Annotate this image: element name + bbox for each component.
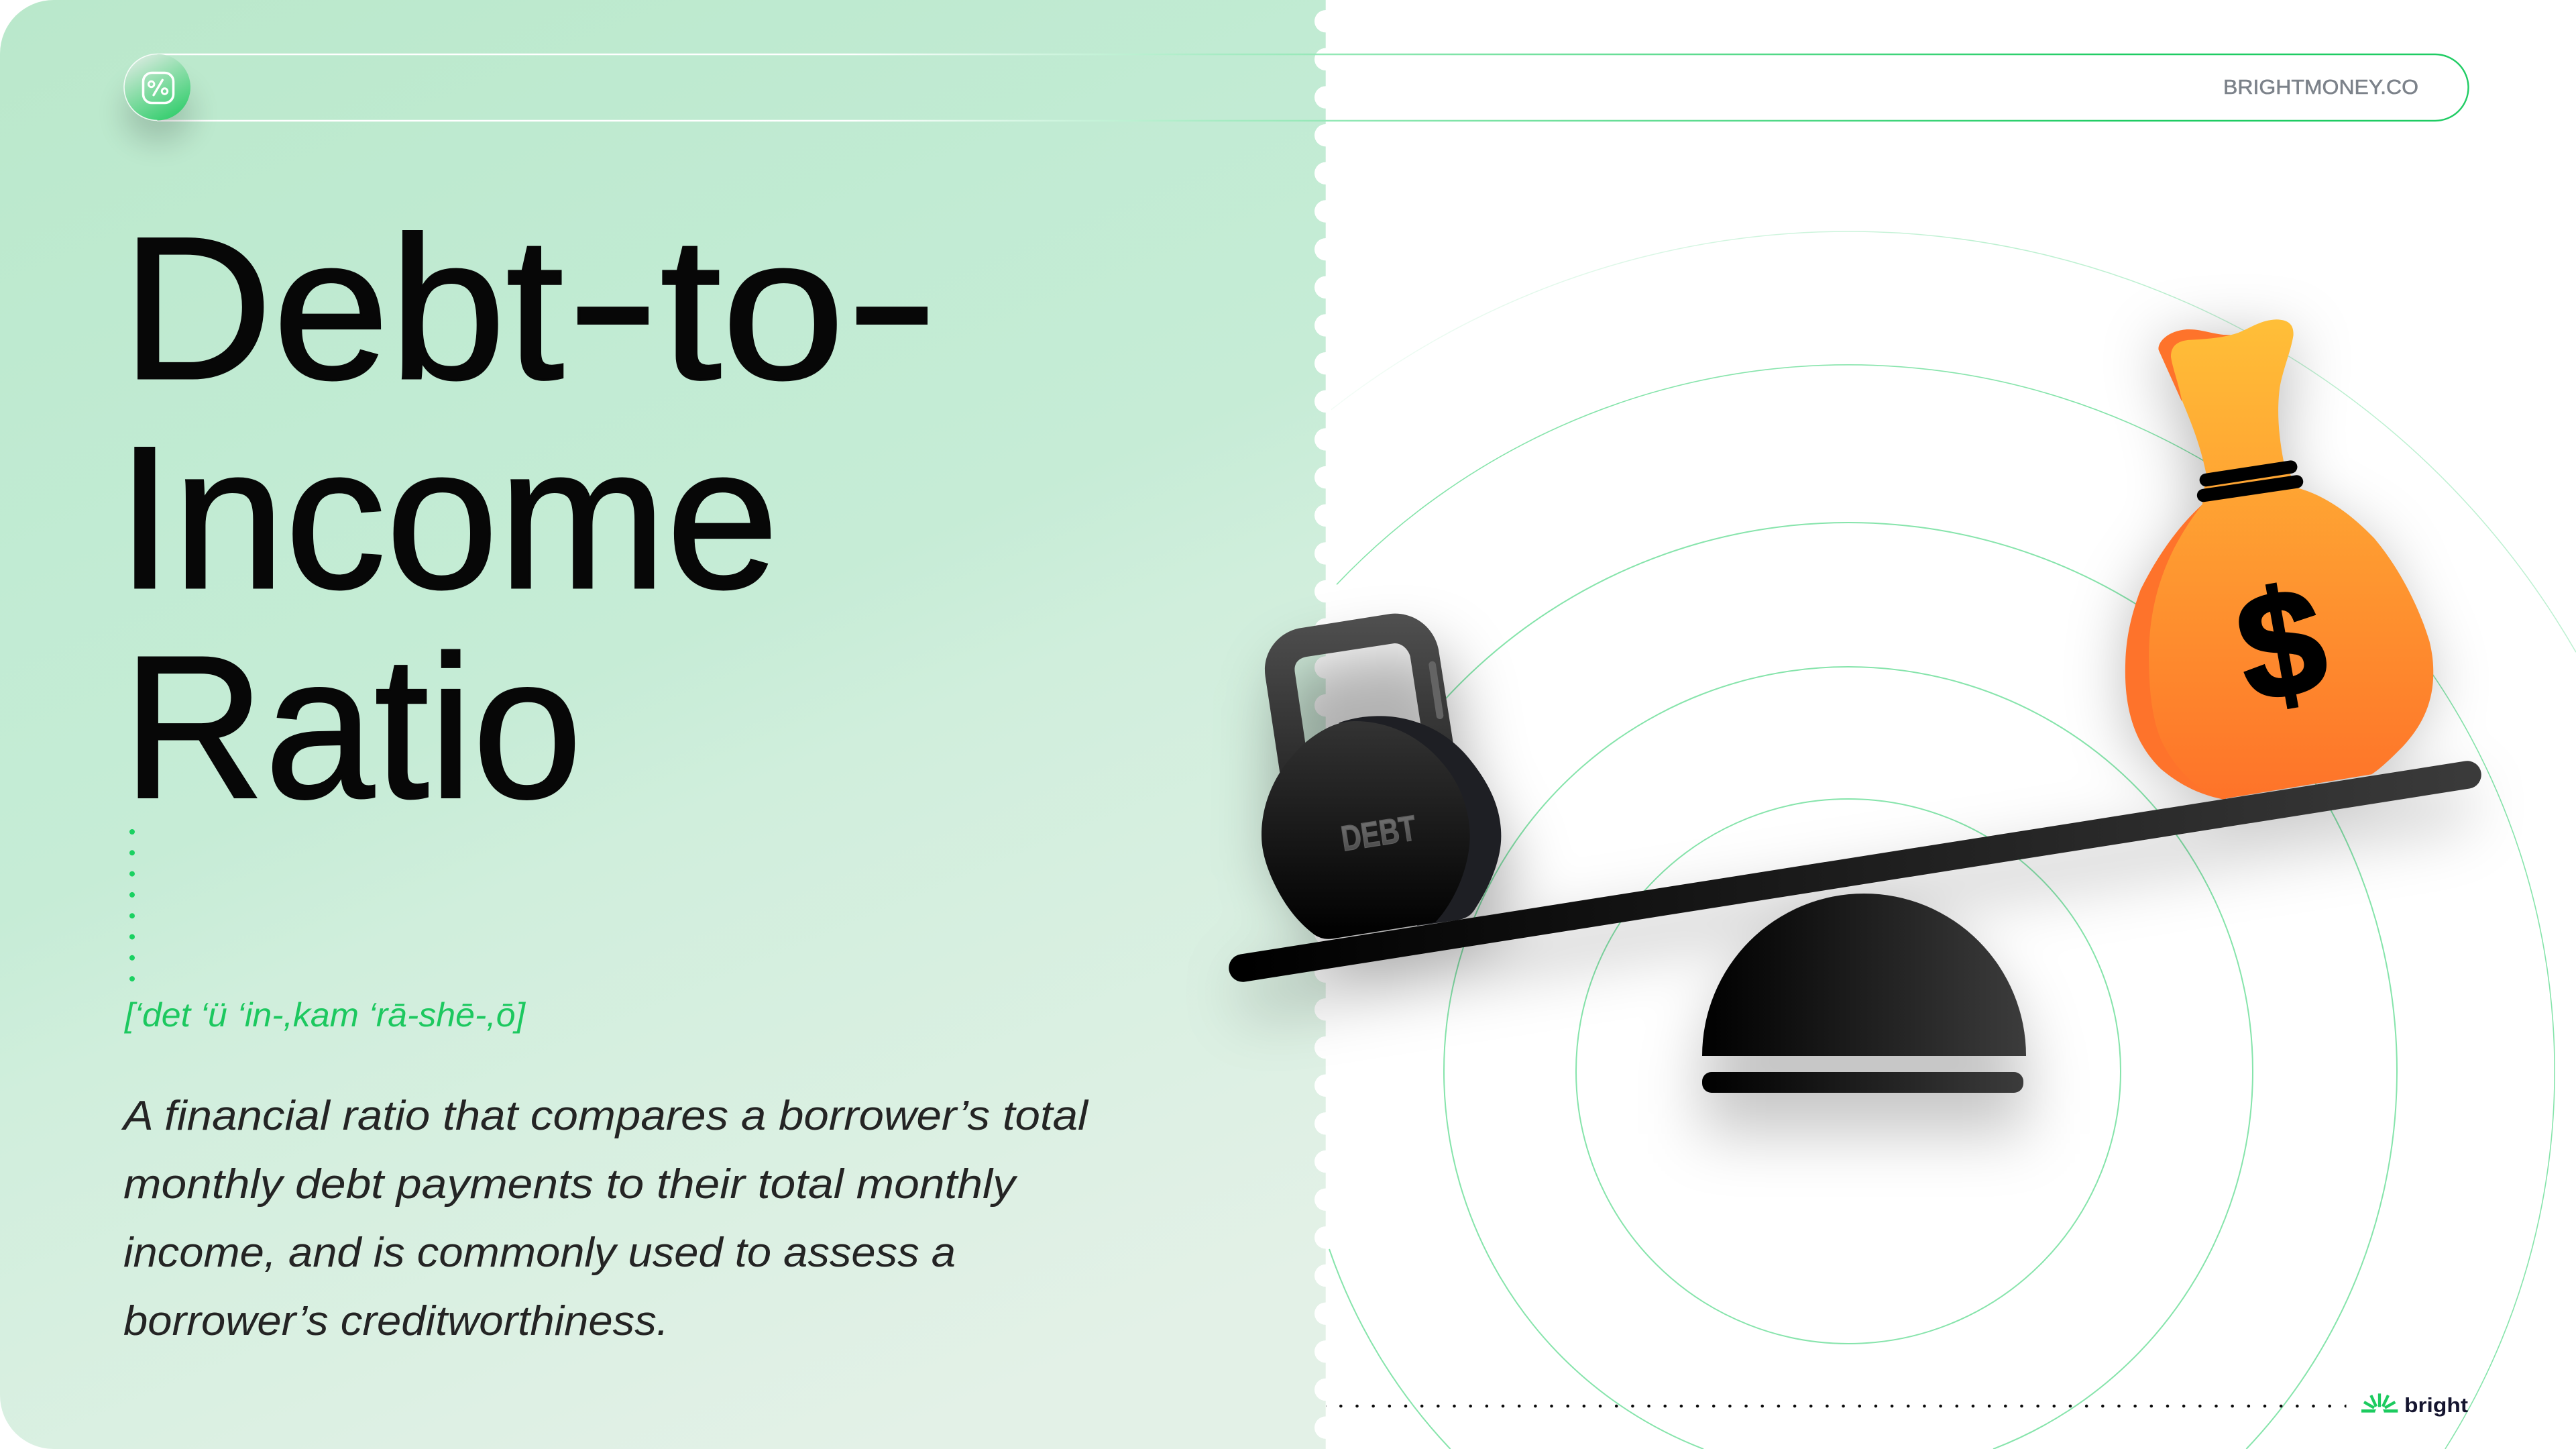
bag front with neck — [2149, 319, 2433, 799]
illustration: kettlebell labelled debt — [1262, 614, 1501, 939]
title: Debt — [121, 195, 565, 422]
kettlebell front face — [1262, 721, 1470, 939]
seesaw beam — [1243, 775, 2467, 968]
definition text: monthly debt payments to their total monthly — [123, 1161, 1018, 1208]
logo mark — [2361, 1393, 2398, 1413]
title: to — [660, 195, 845, 422]
title: Income — [117, 405, 779, 631]
dotted vertical divider — [129, 832, 135, 981]
dotted footer rule — [1325, 1405, 2347, 1407]
title — [117, 186, 939, 841]
badge shadow — [123, 83, 193, 142]
logo: bright — [2361, 1393, 2468, 1417]
bag back — [2125, 329, 2259, 800]
seesaw pivot dome — [1702, 894, 2026, 1056]
title: - — [845, 186, 939, 413]
header pill outline — [157, 54, 2469, 121]
neck ties — [2206, 467, 2291, 480]
concentric rings — [1329, 231, 2576, 1449]
kettlebell handle — [1265, 614, 1453, 773]
definition text: borrower’s creditworthiness. — [123, 1298, 669, 1344]
phonetic spelling: [‘det ‘ü ‘in-,kam ‘rā-shē-,ō] — [124, 996, 526, 1034]
definition text: A financial ratio that compares a borrower’s total — [121, 1093, 1089, 1139]
seesaw base bar — [1702, 1072, 2023, 1093]
illustration: money bag — [2125, 319, 2433, 800]
panel: green left background with perforated edge — [0, 0, 1326, 1449]
logo wordmark: bright — [2404, 1393, 2468, 1417]
title: - — [566, 186, 660, 413]
soft drop shadows under the seesaw — [1243, 337, 2467, 1134]
website label: BRIGHTMONEY.CO — [2223, 75, 2418, 99]
definition text — [121, 1093, 1089, 1344]
definition text: income, and is commonly used to assess a — [123, 1230, 956, 1276]
title: Ratio — [123, 614, 582, 841]
icon: percent badge — [124, 54, 190, 121]
dollar sign: $ — [2225, 553, 2337, 735]
handle highlight — [1433, 665, 1440, 716]
debt label: DEBT — [1339, 808, 1419, 859]
kettlebell back side — [1339, 716, 1501, 926]
